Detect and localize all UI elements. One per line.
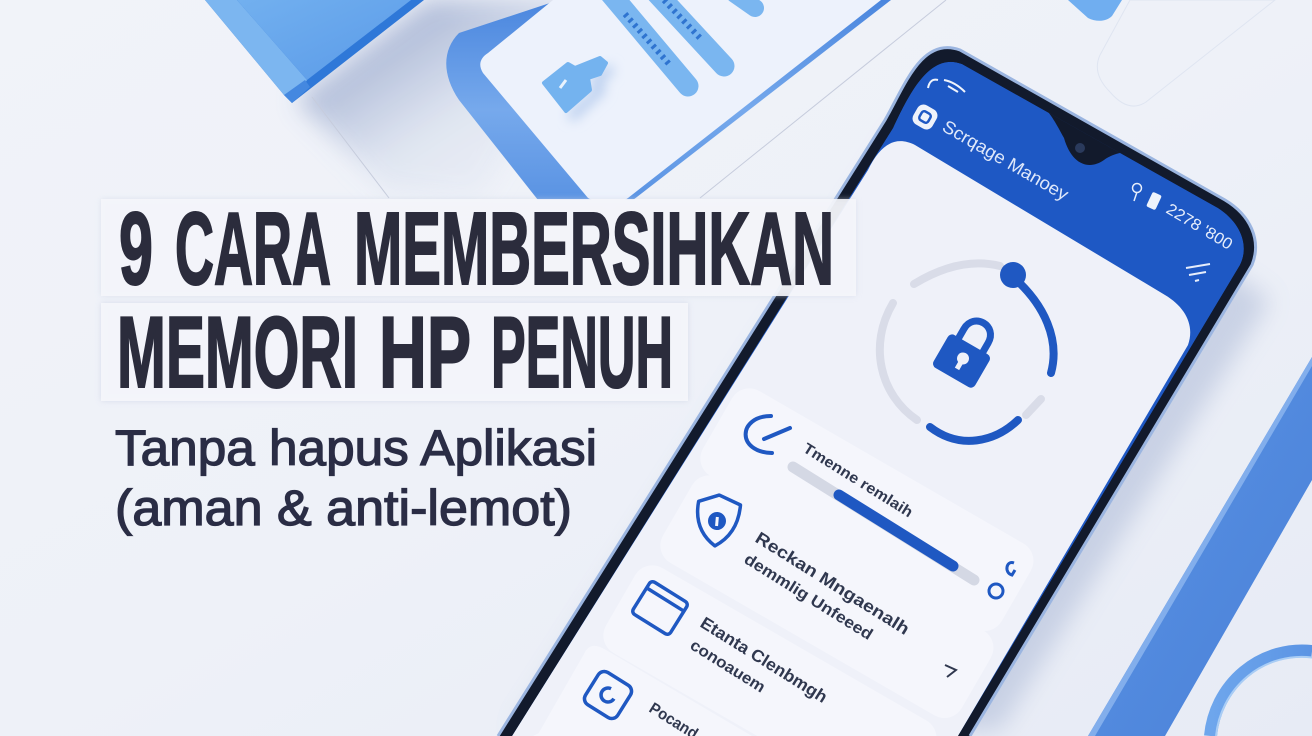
- decorative blue box, top left: [205, 0, 600, 200]
- blue tablet frame with card: [446, 0, 891, 210]
- blue ruler bar, right: [1088, 357, 1312, 736]
- title line 1 words: MEMBERSIHKAN: [354, 191, 834, 306]
- title line 2 words: MEMORI: [117, 297, 358, 409]
- paper sheet edge lines: [312, 0, 946, 198]
- icon: status squiggle: [928, 80, 965, 92]
- storage ring gauge: [880, 262, 1054, 441]
- status icons: [1132, 184, 1162, 210]
- icon: chevron: [945, 665, 956, 677]
- phone: [498, 48, 1270, 736]
- title line 1 box: [101, 191, 856, 306]
- blue ring, bottom right: [1210, 651, 1312, 736]
- lock shaped tab: [544, 58, 612, 118]
- subtitle: [115, 420, 597, 536]
- pill labels: [604, 0, 755, 86]
- icon: menu lines: [1186, 264, 1210, 281]
- icon: shield: [695, 493, 741, 548]
- subtitle: (aman & anti-lemot): [115, 480, 572, 536]
- card 2 label line 1: Reckan Mngaenalh: [752, 528, 913, 639]
- progress bar: [793, 467, 974, 580]
- icon: refresh box: [582, 669, 634, 721]
- subtitle: Tanpa hapus Aplikasi: [115, 420, 597, 476]
- small status marks: [989, 563, 1015, 598]
- icon: padlock: [933, 318, 994, 388]
- list cards: [533, 381, 1041, 736]
- title line 1 words: CARA: [175, 191, 331, 306]
- card 3 label line 1: Etanta Clenbmgh: [697, 613, 831, 707]
- phone body: [498, 48, 1256, 736]
- screen: [512, 62, 1244, 736]
- white app panel: [512, 141, 1190, 736]
- card 1: power icon: [746, 416, 790, 453]
- title line 1 words: [119, 191, 834, 306]
- card 2 label line 2: demmlig Unfeeed: [741, 551, 875, 644]
- translucent tile, top right: [1068, 0, 1275, 106]
- card 1 label: Tmenne remlaih: [800, 440, 916, 521]
- title line 2 box: [101, 297, 688, 409]
- title line 2 words: PENUH: [491, 297, 673, 409]
- clock text: 2278 '800: [1163, 201, 1235, 254]
- camera: [1075, 143, 1085, 153]
- icon: app badge: [912, 104, 938, 130]
- title line 1 words: 9: [119, 191, 153, 306]
- card 3 label line 2: conoauem: [687, 637, 768, 696]
- notch: [1049, 113, 1120, 165]
- header title: Scrqage Manoey: [939, 116, 1072, 204]
- icon: window: [631, 580, 689, 636]
- title line 2 words: HP: [379, 297, 471, 409]
